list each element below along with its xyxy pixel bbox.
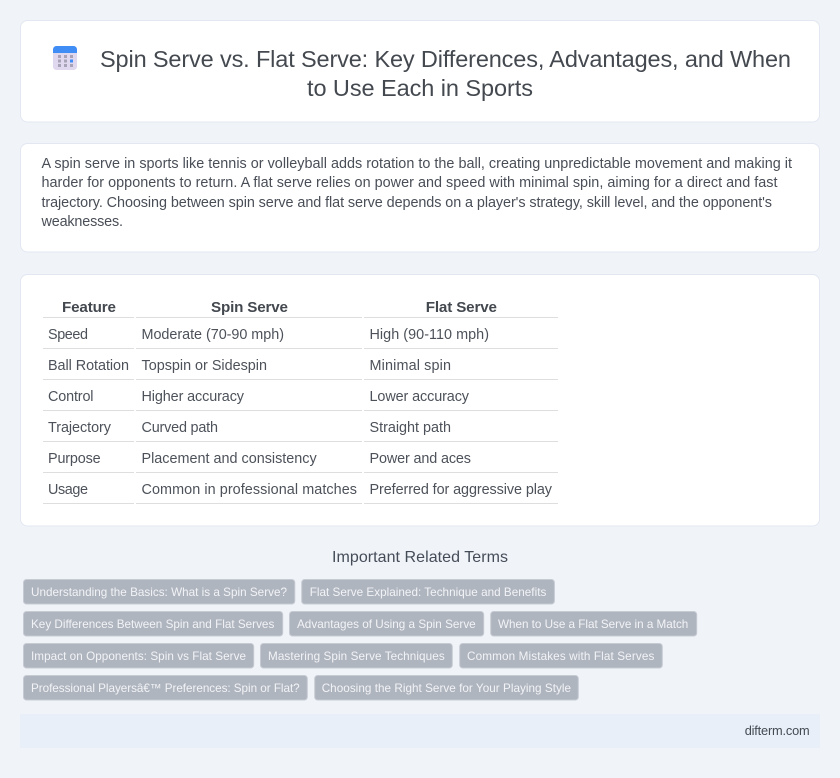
table row: trajectory: Straight path — [370, 420, 451, 436]
chip: Common Mistakes with Flat Serves — [467, 650, 654, 663]
chip — [24, 612, 283, 636]
table row: speed — [48, 327, 489, 343]
related term chips — [24, 580, 697, 700]
footer bar — [20, 714, 820, 748]
chip: Professional Playersâ€™ Preferences: Spin or Flat? — [31, 682, 300, 695]
table row: trajectory — [48, 420, 451, 436]
heading: important related terms: Important Related Terms — [332, 549, 508, 566]
chip — [24, 580, 295, 604]
table row: purpose: Purpose — [48, 451, 101, 467]
table row: ball rotation: Ball Rotation — [48, 358, 129, 374]
table row: ball rotation: Topspin or Sidespin — [142, 358, 267, 374]
chip — [290, 612, 484, 636]
description text: A spin serve in sports like tennis or volleyball adds rotation to the ball, creating unpredictable movement and making it — [42, 156, 792, 172]
table row: ball rotation — [48, 358, 451, 374]
chip: Mastering Spin Serve Techniques — [268, 650, 445, 663]
icon: calendar — [53, 46, 77, 70]
chip — [302, 580, 554, 604]
description text: weaknesses. — [40, 214, 123, 230]
table row: usage: Common in professional matches — [142, 482, 357, 498]
table row: trajectory: Trajectory — [48, 420, 112, 436]
table row: control: Higher accuracy — [142, 389, 245, 405]
description text — [40, 156, 792, 230]
table header row — [62, 299, 497, 316]
description text: trajectory. Choosing between spin serve and flat serve depends on a player's strategy, skill level, and the opponent's — [42, 195, 772, 211]
table header row: Spin Serve — [211, 299, 288, 316]
table row: speed: Moderate (70-90 mph) — [142, 327, 284, 343]
table row: purpose: Placement and consistency — [142, 451, 317, 467]
chip — [491, 612, 697, 636]
chip: Impact on Opponents: Spin vs Flat Serve — [31, 650, 246, 663]
chip — [460, 644, 662, 668]
table row: speed: Speed — [48, 327, 88, 343]
table header row: Flat Serve — [426, 299, 497, 316]
table row: usage: Preferred for aggressive play — [370, 482, 553, 498]
chip: Advantages of Using a Spin Serve — [297, 618, 476, 631]
footer site name: difterm.com — [745, 723, 810, 738]
panel: comparison table — [20, 274, 820, 526]
table row: purpose: Power and aces — [370, 451, 471, 467]
title — [100, 46, 791, 101]
table row: purpose — [48, 451, 471, 467]
chip — [315, 676, 578, 700]
chip — [24, 644, 254, 668]
table header row: Feature — [62, 299, 116, 316]
title: Spin Serve vs. Flat Serve: Key Differences, Advantages, and When — [100, 46, 791, 72]
chip: When to Use a Flat Serve in a Match — [498, 618, 688, 631]
table row: control: Control — [48, 389, 94, 405]
table row: trajectory: Curved path — [142, 420, 218, 436]
table row: control: Lower accuracy — [370, 389, 470, 405]
table row: speed: High (90-110 mph) — [370, 327, 489, 343]
chip — [24, 676, 307, 700]
table row: ball rotation: Minimal spin — [370, 358, 451, 374]
table row: usage — [48, 482, 553, 498]
table row: usage: Usage — [48, 482, 88, 498]
description text: harder for opponents to return. A flat serve relies on power and speed with minimal spin, aiming for a direct and fast — [42, 175, 778, 191]
panel: description — [20, 144, 820, 252]
chip: Key Differences Between Spin and Flat Serves — [31, 618, 274, 631]
chip: Choosing the Right Serve for Your Playing Style — [322, 682, 571, 695]
chip: Flat Serve Explained: Technique and Benefits — [310, 586, 546, 599]
chip — [260, 644, 452, 668]
title: to Use Each in Sports — [307, 75, 533, 101]
chip: Understanding the Basics: What is a Spin Serve? — [31, 586, 287, 599]
panel: title header — [20, 20, 820, 122]
table row: control — [48, 389, 470, 405]
